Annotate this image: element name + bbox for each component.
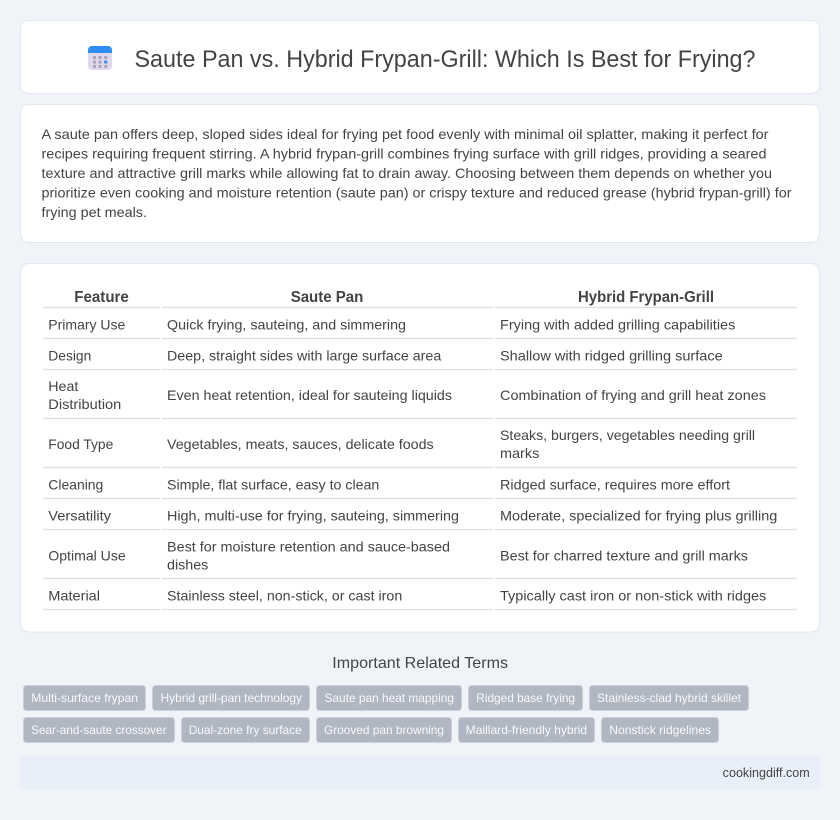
row: optimal use: Best for charred texture and grill marks — [500, 547, 748, 563]
table header: Hybrid Frypan-Grill — [578, 289, 714, 306]
row: material: Typically cast iron or non-stick with ridges — [500, 587, 766, 603]
tag: dual-zone fry surface: Dual-zone fry surface — [189, 723, 302, 737]
row: versatility: Moderate, specialized for frying plus grilling — [500, 507, 777, 523]
row: food type: Vegetables, meats, sauces, delicate foods — [167, 436, 434, 452]
footer source text: cookingdiff.com — [723, 766, 810, 780]
row: food type: Steaks, burgers, vegetables needing grill — [500, 427, 755, 443]
row: primary use — [48, 316, 735, 332]
row: heat distribution: Heat — [48, 378, 78, 394]
tag: sear-and-saute crossover: Sear-and-saute crossover — [31, 723, 166, 737]
table header: Saute Pan — [291, 289, 363, 306]
intro text: prioritize even cooking and moisture retention (saute pan) or crispy texture and reduced grease (hybrid frypan-grill) for — [42, 184, 792, 200]
tag: saute pan heat mapping: Saute pan heat mapping — [324, 691, 454, 705]
row: primary use: Frying with added grilling capabilities — [500, 316, 735, 332]
heading: important related terms: Important Related Terms — [332, 655, 508, 672]
row: cleaning: Ridged surface, requires more effort — [500, 476, 730, 492]
tag: sear-and-saute crossover — [24, 718, 174, 742]
row: heat distribution: Distribution — [48, 396, 121, 412]
row: optimal use: dishes — [167, 556, 208, 572]
table header — [74, 289, 714, 306]
tag: hybrid grill-pan technology: Hybrid grill-pan technology — [160, 691, 302, 705]
tag: maillard-friendly hybrid — [458, 718, 594, 742]
row: design: Shallow with ridged grilling surface — [500, 347, 723, 363]
row: design: Design — [48, 347, 91, 363]
row: versatility: Versatility — [48, 507, 111, 523]
row: heat distribution: Even heat retention, ideal for sauteing liquids — [167, 387, 452, 403]
row: primary use: Primary Use — [48, 316, 126, 332]
panel: comparison table — [20, 264, 820, 632]
title: Saute Pan vs. Hybrid Frypan-Grill: Which Is Best for Frying? — [134, 46, 756, 73]
intro text: texture and attractive grill marks while allowing fat to drain away. Choosing between them depends on whether you — [42, 165, 772, 181]
row: cleaning: Simple, flat surface, easy to clean — [167, 476, 379, 492]
row: food type — [48, 427, 755, 461]
row: material — [48, 587, 766, 603]
tag: maillard-friendly hybrid: Maillard-friendly hybrid — [466, 723, 587, 737]
row: cleaning: Cleaning — [48, 476, 103, 492]
tag: saute pan heat mapping — [316, 686, 462, 710]
row: design: Deep, straight sides with large surface area — [167, 347, 442, 363]
tag: ridged base frying: Ridged base frying — [476, 691, 575, 705]
tag: stainless-clad hybrid skillet: Stainless-clad hybrid skillet — [597, 691, 742, 705]
row: material: Stainless steel, non-stick, or cast iron — [167, 587, 402, 603]
tag: nonstick ridgelines — [602, 718, 718, 742]
table header: Feature — [74, 289, 129, 306]
icon: calendar — [88, 46, 112, 70]
row: primary use: Quick frying, sauteing, and simmering — [167, 316, 406, 332]
row: food type: marks — [500, 445, 539, 461]
tag: nonstick ridgelines: Nonstick ridgelines — [609, 723, 711, 737]
row: cleaning — [48, 476, 730, 492]
row: heat distribution: Combination of frying and grill heat zones — [500, 387, 766, 403]
row: material: Material — [48, 587, 100, 603]
row: food type: Food Type — [48, 436, 114, 452]
row: design — [48, 347, 723, 363]
tag: ridged base frying — [468, 686, 582, 710]
tag: grooved pan browning — [316, 718, 452, 742]
row: versatility — [48, 507, 777, 523]
row: versatility: High, multi-use for frying, sauteing, simmering — [167, 507, 459, 523]
related terms tags — [24, 686, 748, 742]
tag: grooved pan browning: Grooved pan browning — [324, 723, 444, 737]
tag: stainless-clad hybrid skillet — [590, 686, 748, 710]
row: optimal use: Optimal Use — [48, 547, 126, 563]
tag: dual-zone fry surface — [182, 718, 310, 742]
tag: multi-surface frypan — [24, 686, 146, 710]
row: heat distribution — [48, 378, 766, 412]
row: optimal use — [48, 538, 748, 572]
intro text: frying pet meals. — [42, 204, 147, 220]
intro text: recipes requiring frequent stirring. A hybrid frypan-grill combines frying surface with grill ridges, providing a seared — [42, 146, 766, 162]
tag: multi-surface frypan: Multi-surface frypan — [31, 691, 138, 705]
footer band — [20, 756, 820, 790]
panel: introduction — [20, 104, 820, 242]
row: optimal use: Best for moisture retention and sauce-based — [167, 538, 450, 554]
panel: title header — [20, 20, 820, 94]
intro text — [42, 126, 792, 220]
intro text: A saute pan offers deep, sloped sides ideal for frying pet food evenly with minimal oil splatter, making it perfect for — [42, 126, 769, 142]
tag: hybrid grill-pan technology — [152, 686, 310, 710]
